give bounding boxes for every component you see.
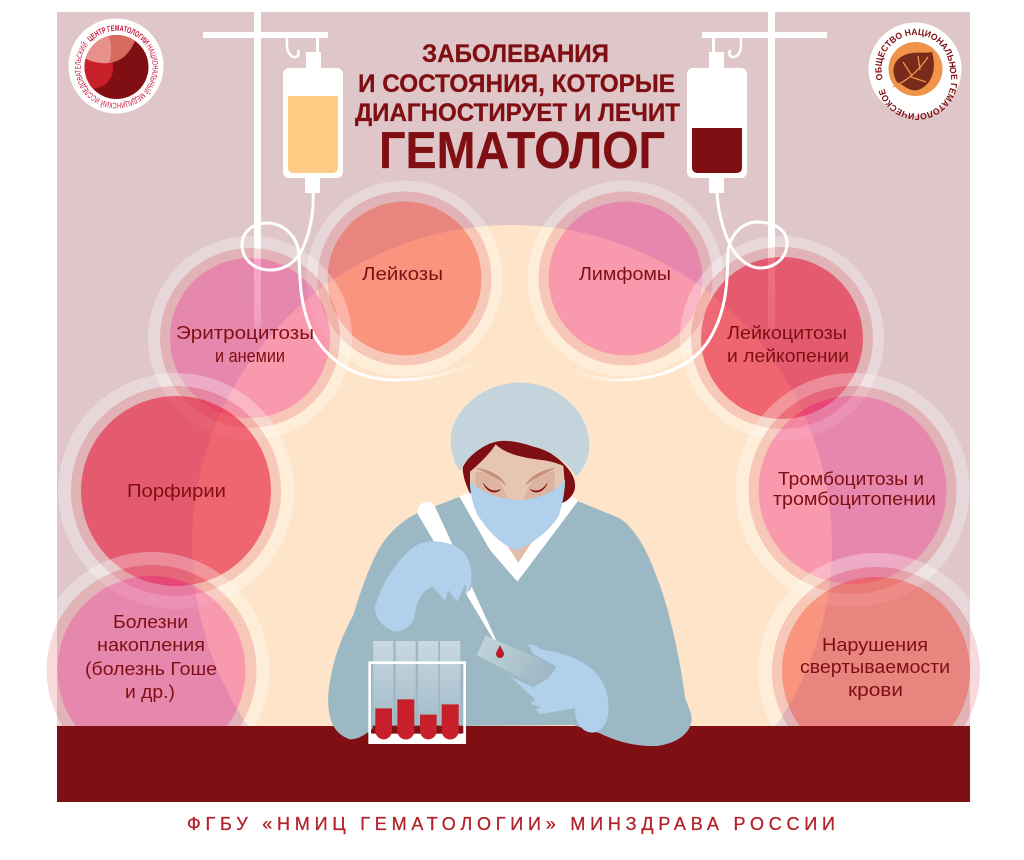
glass tubes <box>373 641 460 729</box>
label: Порфирии: Порфирии <box>127 481 226 501</box>
rack dark strip <box>373 726 462 734</box>
label: Лимфомы: Лимфомы <box>579 264 671 284</box>
circle: Лейкозы <box>312 186 497 371</box>
circle: Болезни накопления <box>46 552 270 726</box>
label: Нарушения свертываемости крови <box>800 635 950 700</box>
label: Тромбоцитозы и тромбоцитопении: Тромбоцитозы и <box>778 469 924 489</box>
eye shadow <box>475 472 555 500</box>
label: Болезни накопления: и др.) <box>125 682 175 702</box>
label: Нарушения свертываемости крови: крови <box>848 680 903 700</box>
blood drop <box>496 645 504 658</box>
pipette tip <box>466 583 498 645</box>
label: Нарушения свертываемости крови: свертываемости <box>800 657 950 677</box>
logo ring text: ОБЩЕСТВО НАЦИОНАЛЬНОЕ ГЕМАТОЛОГИЧЕСКОЕ <box>875 28 958 120</box>
table <box>57 726 970 802</box>
label: Лейкоцитозы и лейкопении <box>727 323 849 366</box>
left glove <box>375 541 472 632</box>
doctor gown <box>328 497 692 746</box>
doctor illustration <box>328 383 692 746</box>
label: Эритроцитозы и анемии <box>176 323 314 366</box>
circle: Лимфомы <box>533 186 718 371</box>
label: Болезни накопления: (болезнь Гоше <box>85 659 217 679</box>
IV stand poles behind the circles <box>203 12 827 345</box>
test tube rack with tubes <box>368 641 466 744</box>
cream halo behind the doctor <box>192 225 832 726</box>
title: И СОСТОЯНИЯ, КОТОРЫЕ <box>358 70 675 98</box>
title: ГЕМАТОЛОГ <box>379 122 665 180</box>
right IV tube <box>570 190 787 380</box>
label: Лейкоцитозы и лейкопении: Лейкоцитозы <box>727 323 847 343</box>
label: Болезни накопления: накопления <box>97 635 205 655</box>
logo ring text: ЦЕНТР ГЕМАТОЛОГИИ НАЦИОНАЛЬНЫЙ МЕДИЦИНСКИЙ ИССЛЕДОВАТЕЛЬСКИЙ <box>74 25 158 108</box>
title <box>355 40 680 180</box>
hair <box>463 441 575 504</box>
footer text: ФГБУ «НМИЦ ГЕМАТОЛОГИИ» МИНЗДРАВА РОССИИ <box>187 814 835 834</box>
label: Тромбоцитозы и тромбоцитопении: тромбоцитопении <box>773 489 936 509</box>
circle: Тромбоцитозы <box>742 380 963 600</box>
eyelashes <box>483 483 547 492</box>
rack frame <box>368 661 466 744</box>
mask <box>470 479 565 551</box>
label: Нарушения свертываемости крови: Нарушения <box>822 635 928 655</box>
circle: Эритроцитозы <box>154 242 346 434</box>
left IV bag <box>283 38 343 193</box>
logo emblem <box>84 35 148 99</box>
title: ДИАГНОСТИРУЕТ И ЛЕЧИТ <box>355 99 680 127</box>
circle: Лейкоцитозы <box>686 242 878 434</box>
glass slide <box>477 636 557 687</box>
eyebrows <box>477 468 555 485</box>
face <box>470 444 565 503</box>
blood levels <box>375 699 459 739</box>
label: Болезни накопления <box>85 612 217 702</box>
label: Лейкоцитозы и лейкопении: и лейкопении <box>727 346 849 366</box>
right glove <box>511 645 609 733</box>
leaf emblem <box>893 52 934 90</box>
cap <box>451 383 589 477</box>
collar <box>459 493 578 582</box>
circle: Нарушения свертываемости <box>758 553 980 726</box>
right IV bag <box>687 38 747 193</box>
neck <box>507 540 533 563</box>
disease circles <box>40 186 987 782</box>
label: Эритроцитозы и анемии: и анемии <box>215 346 285 366</box>
circle: Порфирии <box>64 380 288 602</box>
title: ЗАБОЛЕВАНИЯ <box>422 40 609 68</box>
left IV tube <box>242 190 480 380</box>
logo: national hematology society <box>868 22 962 120</box>
pipette <box>418 502 453 545</box>
label: Болезни накопления: Болезни <box>113 612 188 632</box>
logo: hematology center <box>68 18 164 114</box>
label: Эритроцитозы и анемии: Эритроцитозы <box>176 323 314 343</box>
label: Тромбоцитозы и тромбоцитопении <box>773 469 936 509</box>
label: Лейкозы: Лейкозы <box>362 264 443 284</box>
